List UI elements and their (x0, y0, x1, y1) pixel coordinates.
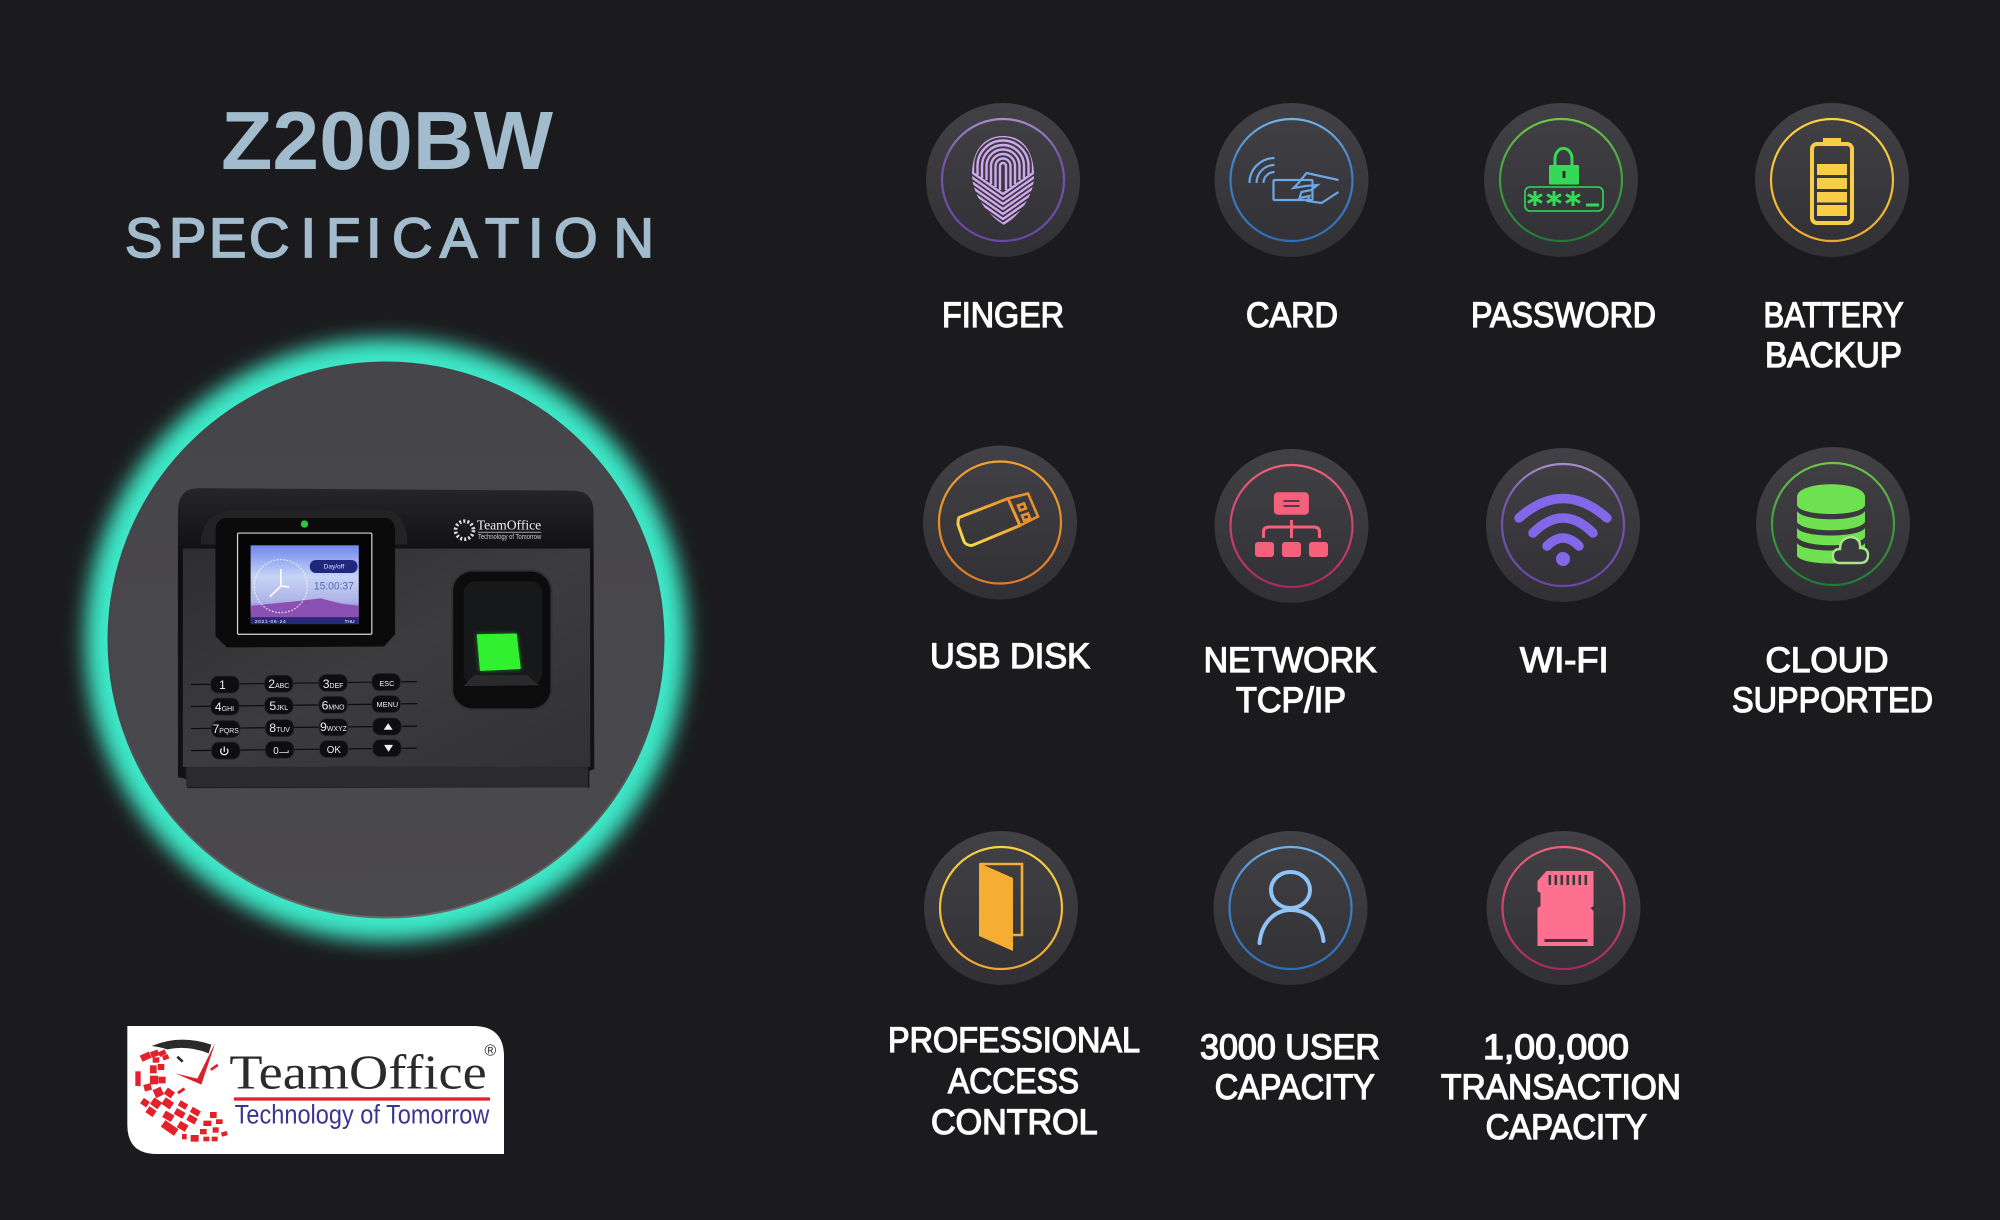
device: biometric terminal (178, 488, 594, 788)
label: 1,00,000 TRANSACTION CAPACITY: TRANSACTION (1441, 1068, 1681, 1107)
icon: database and cloud (1756, 447, 1910, 601)
screen display (251, 545, 359, 625)
label: NETWORK TCP/IP (1204, 641, 1377, 720)
keypad: 5JKL (269, 699, 288, 713)
icon: battery (1755, 103, 1909, 257)
label: NETWORK TCP/IP: NETWORK (1204, 641, 1377, 680)
logo card (127, 1026, 504, 1154)
keypad: 4GHI (215, 700, 234, 714)
registered mark: ® (484, 1042, 496, 1059)
label: NETWORK TCP/IP: TCP/IP (1236, 681, 1346, 720)
screen display: 2021-06-24 (255, 619, 286, 625)
label: USB DISK: USB DISK (930, 637, 1090, 676)
device brand mark (456, 517, 542, 541)
fingerprint sensor (452, 571, 551, 709)
label: 1,00,000 TRANSACTION CAPACITY: CAPACITY (1486, 1108, 1647, 1147)
icon: user (1214, 831, 1368, 985)
label: FINGER: FINGER (942, 296, 1064, 335)
label: 1,00,000 TRANSACTION CAPACITY (1441, 1028, 1681, 1147)
feature: password (1471, 103, 1656, 335)
feature: transaction capacity (1441, 831, 1681, 1147)
label: PASSWORD: PASSWORD (1471, 296, 1656, 335)
subtitle: SPECIFICATION: SPECIFICATION (125, 206, 654, 269)
icon: fingerprint (926, 103, 1080, 257)
logo wordmark: TeamOffice (229, 1046, 487, 1099)
label: PROFESSIONAL ACCESS CONTROL: PROFESSIONAL (888, 1021, 1140, 1060)
screen display: THU (344, 619, 355, 625)
keypad: 0 (273, 746, 279, 757)
device body (178, 488, 594, 788)
feature: network (1204, 449, 1377, 720)
feature: card (1214, 103, 1368, 335)
device brand mark: TeamOffice (477, 517, 541, 532)
label: 3000 USER CAPACITY: 3000 USER (1200, 1028, 1380, 1067)
feature: professional access control (888, 831, 1140, 1142)
icon: network tree (1214, 449, 1368, 603)
label: PROFESSIONAL ACCESS CONTROL: ACCESS (948, 1062, 1079, 1101)
keypad: ESC (379, 679, 395, 688)
feature: cloud supported (1732, 447, 1933, 720)
icon: wifi (1486, 448, 1640, 602)
label: CLOUD SUPPORTED: SUPPORTED (1732, 681, 1933, 720)
screen bezel (216, 518, 395, 647)
icon: card and hand (1214, 103, 1368, 257)
screen display: 15:00:37 (314, 580, 354, 592)
teal glow ring (85, 339, 687, 941)
logo rule (234, 1097, 490, 1101)
label: 3000 USER CAPACITY (1200, 1028, 1380, 1107)
label: CLOUD SUPPORTED (1732, 641, 1933, 720)
keypad: 1 (219, 678, 226, 692)
screen display: Day/off (324, 564, 344, 571)
label: CARD: CARD (1246, 296, 1338, 335)
title: Z200BW: Z200BW (221, 94, 554, 187)
feature: finger (926, 103, 1080, 335)
keypad: 6MNO (322, 698, 345, 712)
label: CLOUD SUPPORTED: CLOUD (1766, 641, 1888, 680)
label: BATTERY BACKUP: BATTERY (1764, 296, 1904, 335)
label: 1,00,000 TRANSACTION CAPACITY: 1,00,000 (1483, 1028, 1629, 1067)
keypad: MENU (377, 700, 398, 709)
feature: battery backup (1755, 103, 1909, 375)
label: 3000 USER CAPACITY: CAPACITY (1215, 1068, 1375, 1107)
keypad: 3DEF (323, 677, 343, 691)
feature: wi-fi (1486, 448, 1640, 680)
screen frame (238, 533, 372, 634)
keypad: 7PQRS (212, 722, 239, 736)
grey disc (108, 362, 664, 918)
feature: usb disk (923, 446, 1090, 676)
icon: memory card (1486, 831, 1640, 985)
logo mark: red clock squares (135, 1049, 228, 1142)
label: PROFESSIONAL ACCESS CONTROL: CONTROL (931, 1103, 1098, 1142)
keypad: 9WXYZ (320, 720, 348, 734)
label: BATTERY BACKUP: BACKUP (1765, 336, 1902, 375)
logo: TeamOffice (127, 1026, 504, 1154)
keypad: 8TUV (269, 721, 290, 735)
feature: user capacity (1200, 831, 1380, 1107)
label: PROFESSIONAL ACCESS CONTROL (888, 1021, 1140, 1142)
logo tagline: Technology of Tomorrow (235, 1100, 490, 1130)
keypad (191, 673, 417, 759)
icon: usb stick (923, 446, 1077, 600)
status LED (301, 520, 308, 528)
label: WI-FI: WI-FI (1520, 641, 1609, 680)
icon: padlock and password field (1484, 103, 1638, 257)
panel: device disc with teal glow (85, 339, 687, 941)
icon: door (924, 831, 1078, 985)
keypad: 2ABC (268, 677, 289, 691)
logo mark: clock hands (152, 1040, 211, 1053)
label: BATTERY BACKUP (1764, 296, 1904, 375)
device brand mark: Technology of Tomorrow (478, 534, 542, 541)
keypad: OK (327, 745, 341, 756)
